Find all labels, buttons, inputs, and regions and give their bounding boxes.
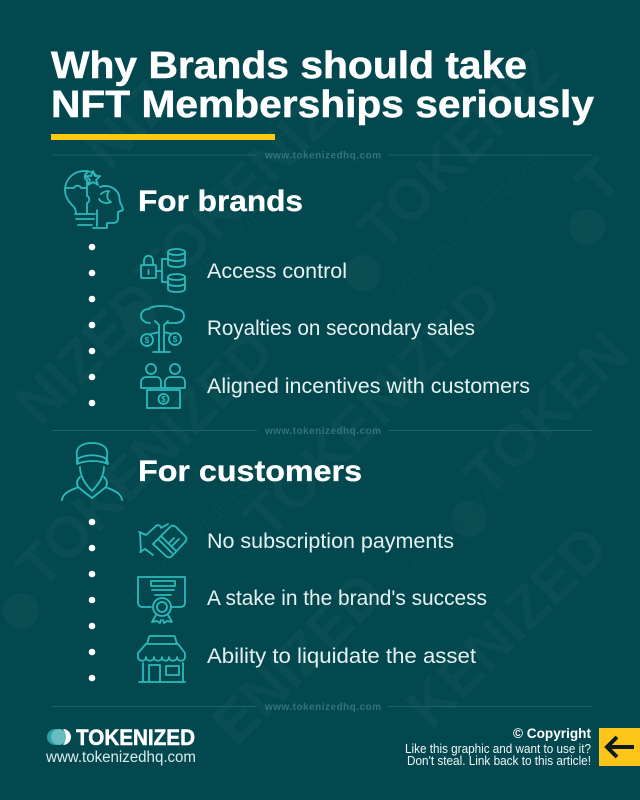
watermark pattern: TOKEN <box>452 319 640 508</box>
watermark pattern: www.tokenizedhq.com <box>387 147 544 304</box>
watermark pattern: TOKENIZ <box>346 37 571 262</box>
icon: money tree: $ <box>145 336 150 345</box>
icon: certificate <box>138 577 185 623</box>
heading: for brands: For brands <box>138 185 303 218</box>
watermark pattern: TOKENIZED <box>4 318 286 600</box>
brand url: www.tokenizedhq.com <box>45 749 196 766</box>
icon: people with banknote <box>141 364 185 408</box>
divider 3: www.tokenizedhq.com <box>264 702 381 713</box>
title <box>51 45 594 126</box>
icon: money tree <box>141 306 184 352</box>
watermark pattern: www.tokenizedhq.com <box>117 197 274 354</box>
watermark pattern: TOKENIZ <box>122 83 347 308</box>
icon: hand with credit card <box>139 524 186 558</box>
heading: for customers: For customers <box>138 455 362 488</box>
watermark pattern: ENIZED <box>200 560 396 757</box>
brand logo: TOKENIZED <box>76 725 195 750</box>
copyright notice: Don't steal. Link back to this article! <box>407 754 591 768</box>
watermark pattern: www.tokenizedhq.com <box>397 427 554 584</box>
text: access control: Access control <box>207 260 347 283</box>
icon: customer with cap <box>62 443 122 500</box>
divider 1: www.tokenizedhq.com <box>264 150 381 162</box>
icon: storefront <box>138 636 185 682</box>
copyright notice: © Copyright <box>513 726 591 741</box>
dots: customers <box>89 519 95 681</box>
title underline <box>51 134 275 140</box>
title: NFT Memberships seriously <box>51 84 594 126</box>
watermark pattern: NIZED <box>3 268 172 437</box>
dots: brands <box>89 244 95 406</box>
text: ability to liquidate the asset: Ability to liquidate the asset <box>207 645 476 668</box>
watermark pattern: KENIZED <box>394 514 620 740</box>
copyright notice <box>405 726 591 768</box>
icon: lock and databases <box>141 249 185 292</box>
icon: money tree: $ <box>173 335 178 344</box>
text: royalties on secondary sales: Royalties on secondary sales <box>207 317 475 340</box>
watermark pattern: www.tokenizedhq.com <box>117 457 274 614</box>
text: aligned incentives with customers: Aligned incentives with customers <box>207 375 530 398</box>
icon: people with banknote: $ <box>161 395 166 404</box>
watermark pattern: TOKENIZED <box>232 268 514 550</box>
watermark pattern: T <box>563 145 634 216</box>
icon: lightbulb and head puzzle <box>65 171 123 228</box>
text: no subscription payments: No subscription payments <box>207 530 454 553</box>
text: a stake in the brand's success: A stake in the brand's success <box>207 587 487 610</box>
divider 2: www.tokenizedhq.com <box>264 426 381 437</box>
title: Why Brands should take <box>51 45 527 87</box>
watermark pattern: NIZ <box>72 68 184 180</box>
yellow arrow badge <box>599 728 640 766</box>
copyright notice: Like this graphic and want to use it? <box>405 742 591 756</box>
